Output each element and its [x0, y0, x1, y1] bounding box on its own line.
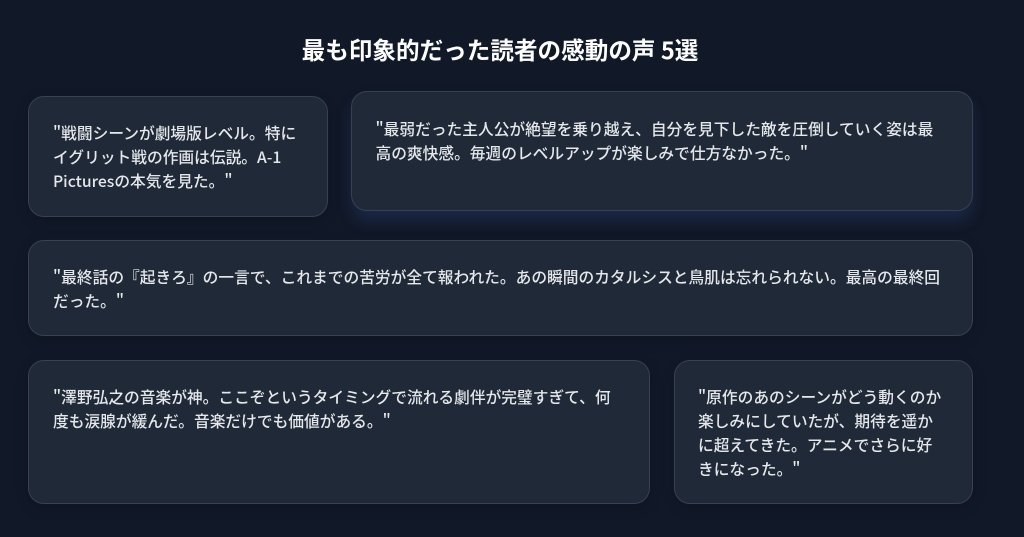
quote 2 text: 高の爽快感。毎週のレベルアップが楽しみで仕方なかった。" — [376, 140, 808, 164]
title: 最も印象的だった読者の感動の声 5選 — [302, 32, 698, 66]
panel: quote 1 — [28, 96, 328, 217]
quote 1 text: "戦闘シーンが劇場版レベル。特に — [53, 121, 296, 144]
quote 1 text: イグリット戦の作画は伝説。A-1 — [53, 145, 281, 168]
panel: quote 4 — [28, 360, 650, 504]
quote 1 text: Picturesの本気を見た。" — [53, 169, 233, 192]
panel: quote 5 — [674, 360, 973, 504]
panel: quote 3 — [28, 240, 973, 336]
panel: quote 2 highlighted — [351, 91, 973, 211]
quote 5 text: きになった。" — [698, 457, 800, 480]
quote 3 text: "最終話の『起きろ』の一言で、これまでの苦労が全て報われた。あの瞬間のカタルシスと鳥肌は忘れられない。最高の最終回 — [53, 265, 940, 288]
quote 4 text — [53, 385, 611, 432]
quote 5 text: "原作のあのシーンがどう動くのか — [698, 385, 941, 408]
quote 5 text: に超えてきた。アニメでさらに好 — [698, 433, 932, 456]
quote 5 text — [698, 385, 941, 480]
quote 2 text — [376, 116, 933, 164]
quote 1 text — [53, 121, 296, 192]
quote 5 text: 楽しみにしていたが、期待を遥か — [698, 409, 933, 432]
quote 3 text — [53, 265, 940, 312]
quote 3 text: だった。" — [53, 289, 124, 312]
quote 4 text: "澤野弘之の音楽が神。ここぞというタイミングで流れる劇伴が完璧すぎて、何 — [53, 385, 611, 408]
quote 2 text: "最弱だった主人公が絶望を乗り越え、自分を見下した敵を圧倒していく姿は最 — [376, 116, 933, 140]
quote 4 text: 度も涙腺が緩んだ。音楽だけでも価値がある。" — [53, 409, 391, 432]
